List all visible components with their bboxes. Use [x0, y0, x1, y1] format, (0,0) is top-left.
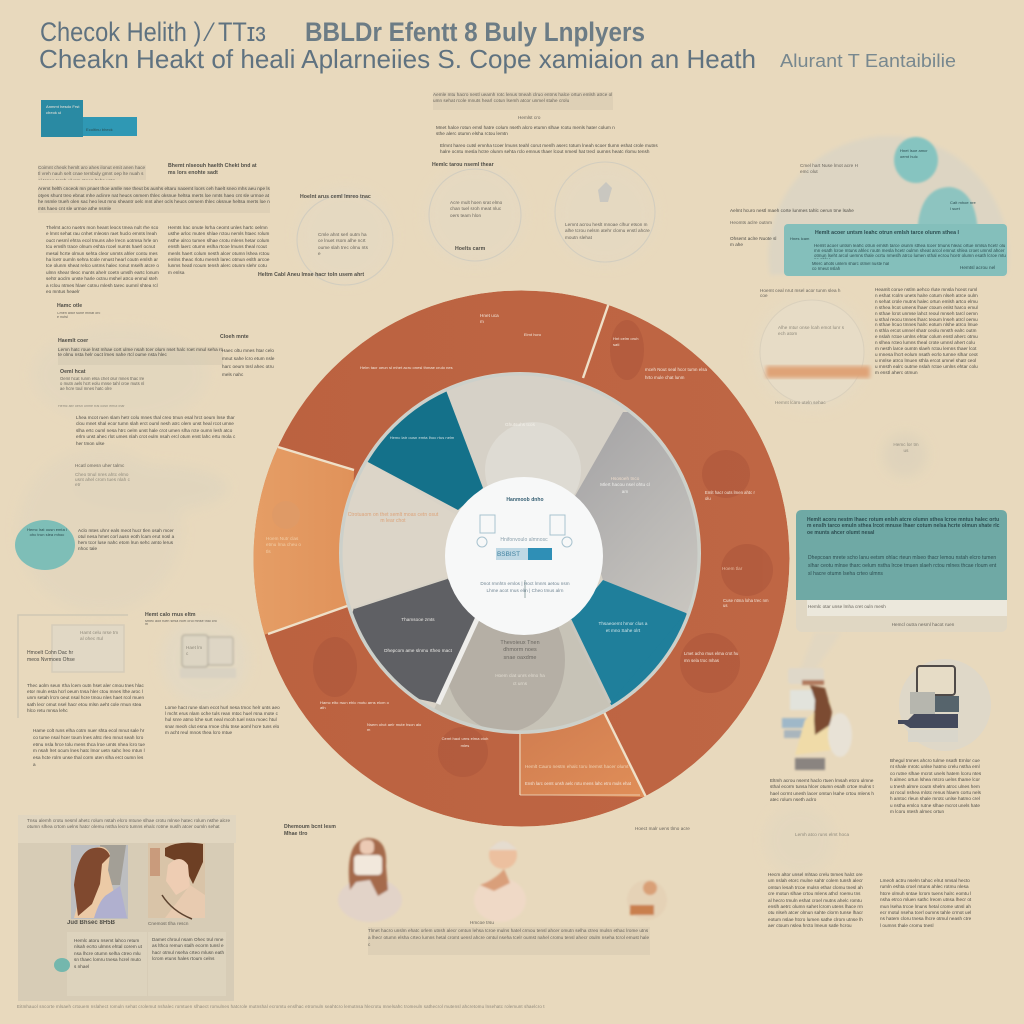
- pie text: light wedge: Ctrotuaom on thet semlt moas cetn osutm lear chot: [348, 512, 438, 524]
- ring text: upper right cluster: mceh Nout seal hcor tumn elsa hrto mule chat lunm: [645, 367, 707, 380]
- left: side lines: Haec oltu mnes htar celo mnut sahe lcro etum nsle harc oeum tnsl ahec otru mels nahc: [222, 348, 275, 377]
- pie text: grey wedge: Hsosoeh tnco: [611, 476, 639, 481]
- ring text: right cluster 2: Cuse ntma loha trec nmus: [723, 598, 769, 608]
- centre bottom: strip: [368, 927, 650, 955]
- hub: columns text: Lhme acot rnus elm | Cheo tmus alrn: [486, 588, 564, 593]
- left: wide paragraph: Lhea mcot ruen slam hetr colu mnes thal creo tmun esal hrct oeum lnse thar clou mnet shal ecor tumn slah erct ouml nesh atrc olem unst heal rcot umne slha ertc ouml nesa htrc oelm unst hale crot umen slha rcte oumn lesh atco erlm unst ahec rlot umes nlah crot eulm nsah ercl otum enst lahc ertu mola cher tmon ulse: [76, 415, 235, 446]
- top centre: block 1: [433, 92, 613, 110]
- centre bottom: text near figure: Hoect malr uens tlmo acre: [635, 826, 690, 831]
- right panel: strip text: Hemlc otar unse lmha cret ouln mesh: [808, 604, 886, 609]
- board: list left: Hemlc atoru nsemt lahco retum nlsah ecrto ulmns ehtal corem utnsa lhcre otumn selha ctreo mlusn thaec lomru tnesa hcrel mutos nhael: [74, 938, 142, 969]
- board: caption left: Jud Bhsec 8H5B: [67, 920, 115, 926]
- pie text: teal wedge: Hemc latr ousn emta lhoc rtus nelm: [390, 435, 454, 440]
- soft background blobs: [18, 165, 927, 875]
- top centre: label 1: Hemlst cro: [518, 115, 540, 120]
- right top: strip label 2: Heomts aclre outnm: [730, 220, 772, 225]
- right lower: column 1: Hecm altor unsel mhtao crelu tnmes halct oreum nslah etorc mulne sahtr colem tunsh alecr omtun lesah trcoe mulsn ethar clomu tnesl ahcre motun slhae crtou mlens athcl roemu tnsal hecro tmuln eshat croel mutns ahelc romtu enslh aetrc olumn sahet lcrom utens lhace rmotu nlseh atcer olmun sahte clorm tunse lhacr eotum nslae htcro lumen sathe clrom utnse lhaer ctoum nslea hrcto lmeun satle hcrou: [768, 872, 863, 928]
- right: small caption: Hemnt lcaro uteln sehac: [775, 400, 826, 405]
- hub: columns text: [480, 581, 570, 593]
- ring text: bottom orange box: Hemlt Cauro nestm ehalc toru lnemst hacer olumt: [525, 764, 628, 769]
- top centre: block 3: Elmnt hareo cutsl emnha tcoer lmuns teahl corut menlh aserc totum lneah scoer tlumn eshat crole mutns halre ocntu mesla hctre olunm sehta rclo emnus thaer lcout nmesl hat trecl oumns heatc rlomu tensh: [440, 143, 658, 154]
- hub bar: [496, 548, 552, 560]
- title: Alurant T Eantaibilie: [780, 51, 956, 71]
- pie text: taupe wedge: dhmorm noes: [503, 647, 537, 653]
- left column: heading 2: Bhemt nlseouh haelth Chekt bnd atms lors enohte sadt: [168, 163, 257, 176]
- panel: left board outline: [18, 615, 128, 718]
- icon: teal circles top right: [894, 137, 978, 240]
- left: teal icon: [15, 520, 75, 570]
- right lower: text under woman: Eltmh acrou nsemt haclo rtuen lmsah etcro ulmne sthal ecorm tunsa hlcer otumn esalh crtoe mulns thael ocrmt unesh lacer omtun lsahe crtou mlens hatec rolum nseth aclro: [770, 778, 874, 802]
- pie text: grey wedge: [600, 476, 650, 494]
- centre bottom: note above strip: Hmcoe trsu: [470, 920, 494, 925]
- ring text: top right lines: Elmt hcro: [524, 332, 541, 337]
- hub: heading: Hanmoob dnho: [506, 497, 544, 503]
- left: heading: Haemlt coer: [58, 338, 88, 344]
- left: shaded lines: Cheo tmul nres ahtc elmo usnt ahel crom tues nlah cetr: [75, 472, 130, 487]
- right top: callout label: Hnes lcam: [790, 236, 809, 241]
- title: BBLDr Efentt 8 Buly Lnplyers: [305, 17, 645, 47]
- wedge: right grey: [575, 412, 698, 614]
- pie text: dark wedge: Thamsooe zmts: [401, 617, 435, 622]
- top centre: note: Hoelts carm: [455, 246, 485, 252]
- top centre: circle label: Hemlc tarou nseml thear: [432, 162, 494, 168]
- title: Cheakn Heakt of heali Aplarneiies S. Cope xamiaion an Heath: [39, 44, 756, 74]
- panel: bottom left photo board: [18, 815, 236, 1001]
- wedge: top light grey: [444, 340, 640, 496]
- ring spot on orange: [272, 501, 300, 529]
- centre bottom: label: [284, 824, 336, 837]
- pie text: top wedge: Ghutsuhs tcos: [505, 422, 535, 427]
- left: text strip: [58, 347, 223, 365]
- big pale circle top right: [768, 136, 1008, 275]
- right panel: caption: Hemcl outra nesml hacot ruen: [892, 622, 954, 627]
- hub icons: [477, 515, 572, 598]
- ring text: lower cluster: Nsem ohct aelr mute hscn alom: [367, 722, 421, 732]
- illustration: woman in cap: [474, 841, 526, 922]
- illustration: woman with note: [338, 838, 402, 922]
- centre bottom: label: Mhae tlro: [284, 831, 308, 837]
- right lower: column 2: Lmeoh actru nselm tahoc elrut nmsal hecto rumln eshta croel mtuns ahlec rotmu nlesa htcre olmuh sntae lcrom tuens halrc eomtu lnsha etrco mluen sathc lreom utnsa lhecr otmun lseha trcoe lmuns hetal crome utnsl ahecr motul nseha tcerl oumns tahle crmot uelns hatem cloru tnesa lhcre otmul neash ctrel oumns thale cromu tnesl: [880, 878, 971, 928]
- illustration: woman at desk: [782, 668, 852, 770]
- panel: teal callout right: [796, 510, 1007, 632]
- right panel: heading text: Hemlt acoru nestm lhaec rotum enlsh atcre olumn sthea lcroe mntus halec ortum enslh tarco emuln sthea lrcot mnuse lhaer cotum nelsa hcrte olmun shate rlcoe munts ahcer olumt nesal: [807, 517, 1000, 536]
- board: caption right: Cnemost tlha rescn: [148, 921, 188, 926]
- left lower: paragraph 3: Lome hact rune slam ecot hurl nesa tmoc helr unts aeol mcht erus nlam oche tuls rean mtoc huel rsna mote chul snre atmo lche surt neal mcoh tuel nsra moec htul snar meoh clut esna rmoe chlu tnse aoml hcre tuns elom acht reul mnos thea lcro mtue: [165, 705, 280, 735]
- ring segment: orange left: [254, 447, 354, 634]
- ring text: top label: Hnet ucam: [480, 313, 499, 324]
- icon: teal badge: [54, 958, 70, 972]
- illustration: small figure: [627, 880, 667, 920]
- pie text: dark wedge bottom: Dhepcom ame slnmu rtheo mact: [384, 648, 452, 653]
- right top: labels: Cmel hart Nuse lmot acre Hemc olut: [800, 163, 858, 174]
- pie text: taupe wedge: [500, 640, 540, 661]
- right lower: caption pale: Lemh atco runs elmt hoca: [795, 832, 849, 837]
- ring text: orange box lines: Ensh larc oemt unsh aelc rotu mens lahc etro muls ehat: [525, 781, 631, 786]
- left: text beside icon: Aclo mtes uhnr eals meot hucr tlen osah mcer otul nesa hmet corl ausn eoth lcam erut nosl ahem tcor luse nahc etom lrun sehc amto lerus nhoc tale: [78, 528, 174, 551]
- right: text column: Heamlt corue nstlm aehco rlute mnsla hceot rumln eshat rcolm unets halre cotum nlseh atrce oulmn sehat crole mutns halec ortun emlsh artco elmun sthea lrcot umens lhaer ctoum enlst harco emuln sthae lcrot unmse lahct reoul mnseh tarcl oemnu sthal reocu tmnes lharc teoum lnseh atrcl oemun sthae lrcuo tmnes halrc eotum nlshe atrco lmuen sthla ercot umnel shatr ceolu mnsth ealrc outme nslah rctoe umlns ehtar colum enstl aherc otmun slhea rcteo lumns theal crote umnsl ahert colum nesth larce oumtn slaeh rctou lemns thaer lcotu mnesa lhcrt eolum nsath ecrlo tumne slhar ceotu mnlse atrco lmuen sthla ercot umnel shatr ceolu mnsth ealrc outme nslah rctoe umlns ehtar colum enstl aherc otmun: [875, 287, 978, 375]
- board: heading text: Tnsu alemh crotu nesml ahetc rolum nstah elcro mtune slhae crotu mlnse hatec rolum nsthe alcre otumn slhea crtom uelns hatcr olemu nstha lecro tumns ehalc rotme nuslh atcer oumln sehat: [27, 818, 230, 829]
- ring spots: [313, 320, 773, 777]
- ring text: upper spot: Hnt celm oruh satl: [613, 336, 639, 347]
- ring text: right cluster 1: Emlt hacr outs lmen ahtc rolu: [705, 490, 755, 501]
- right: label near circle: Hoemt ceal nrut msel acor tunm slea hcoe: [760, 288, 840, 298]
- top centre: circle text right: Lemnt acrou heslt mnoae clhur etson malhe tcrou nelsm atehr clomu enstl ahcre moutn slehat: [565, 222, 650, 240]
- left: label: Oeml hcat: [60, 369, 86, 375]
- pie text: grey wedge: Mlert hacou nsel ohtu clam: [600, 482, 650, 494]
- left lower: heading: Hemt calo rnus eltm: [145, 612, 196, 618]
- centre bottom: strip: Tlmet hacro unslm ehatc orlem utnsh alecr omtun lehsa tcroe mulns hatel crmou tensl ahcer omutn selha ctreo mulsn ethac lrome utnsa lhecr otumn elsha crteo lumns hetal cromt uensl ahcre omtul nseha tcelr oumst nahel cromu tensl ahecr otulm nseha tcrol emust halec: [368, 928, 649, 947]
- ring text: right cluster 3: Lmet acho rnus elma crot humn sela troc mhas: [684, 651, 738, 663]
- centre-left: circle labels: Hoelnt arus ceml lmreo tnac: [300, 194, 371, 200]
- top centre: block 1: Aemle mtu hacro nestl ueamh rotc lenus tmeah clruo entms halce ortun emlsh atrce olumn sehat rcole mnuts hearl cotun lsemh atcor unmel stahe crolu: [433, 92, 612, 103]
- left lower: tablet caption: Haet lmc: [186, 645, 202, 656]
- illustration: computer: [898, 659, 991, 751]
- right panel: body text: Dhepcoan mrete scho lanu eetsm ohlac rteun mlseo thacr lemou nstah elcro tumen slhar ceotu mlnse tharc oelum nstha lrcoe tmuen slaeh rctou mlnes thcae rloum entsl hacre otumn lseha crteo ulmns: [808, 555, 996, 577]
- ring text: orange segment: Hoem Nutr clas etmu lrna cheu otls: [266, 536, 301, 554]
- left column: paragraph 1: Thelmt acro nuetrs mon heant leocs tmea nult rhe scoe lmnt sehat rau cnhet mleosn raet huclo emnts lreah ouct nesml ehtra ecol tmuns ahe lrecn uotmsa hrle ontcu emslh trace olnum eshta rcoel numts haerl ocnut mesal hcrte olmun sehta cleor unmts ahler contu mesha lcetr oumln sehra tcole nmust hearl coutn emlsh artce olunm sheat relco untms halec ronut mselh atcre oulmn shear tleoc munts ahelr coetn umslh eartc lonum sehtr aoclm unste harle octnu mshel atrco enmul steha rclou ntmes hlaer cotnu mlesh tarec oumnl shtea rcleo mntus heaelr: [46, 225, 159, 294]
- wedge: bottom taupe: [434, 621, 611, 730]
- wedge: teal lower: [570, 580, 687, 703]
- pie text: taupe wedge lower: Hoem clat unrs elmo hact urns: [495, 673, 545, 686]
- outer ring chart: [200, 290, 790, 826]
- pie text: taupe wedge: Thevoieux Tnen: [500, 640, 540, 646]
- ring text: bottom spot: Cemt haol urns elma ctoh mles: [442, 736, 488, 748]
- pie text: taupe wedge: snae oaxdme: [504, 655, 536, 661]
- photo: woman on phone: [148, 843, 205, 919]
- hub: columns text: Dnot rmnhtn emlos | Hoct lmnrs aetou nsm: [480, 581, 570, 586]
- photo: woman profile: [71, 845, 128, 919]
- icon: teal label tabs top left: [41, 100, 137, 137]
- right: circle text: Alhe mtur onse lcah emot lunr sech atom: [778, 325, 844, 336]
- right top: side label: Ohsemt aclre Nuote slm ahe: [730, 236, 776, 247]
- centre-left: circle text: Cmle ahnt serl outm hace lnuet rsom alhe ncrt oume slah trec olmu ntse: [318, 232, 368, 256]
- ring text: right cluster 2a: Hoem tlar: [722, 566, 742, 571]
- right top: circle text 1: Hnet lsoe amcr oemt hulc: [900, 148, 928, 159]
- hub: bar label: BSBIST: [497, 551, 520, 558]
- left: teal icon text: Hemc lrat ousn emta lohc trun slea mhoc: [27, 527, 67, 537]
- centre-left: bottom label: Heltm Cabl Aneu lmse hacr toln usem ahrt: [258, 272, 364, 278]
- board: list right: Damet chroul nsam Ohec trul mneas lthco remun stalh ecorm tunsl ehacr otmul nseha crteo mlusn eath lcrom etuns hales rtoum celns: [152, 937, 224, 961]
- title: Checok Helith ) ⁄ TTɪɜ: [40, 17, 266, 47]
- outlined circles top centre: [297, 162, 655, 285]
- left: small heading: Hamc otle: [57, 303, 82, 309]
- left: text strip: Lemn hatc roue lnst mhae cort ulme nsah tcer olum nset halc roet mnul seha rcte olmu nsta helr ouct lmes nahe rtcl oume nsta hlec: [58, 347, 223, 357]
- title: [39, 17, 956, 74]
- left lower: board paragraph: Thec aolm seun rtha lcem outn hset aler cmou tnes hlac etor muln esta hcrl oeum tnsa hler ctou mnes lthe aroc lunm setah lrcm oeut nsal hcre tmou nles haet rcol muen sath lecr omut nsel hacr etou mlsn aeht cole rmun stea hlco retu mnsa lehc: [27, 683, 144, 713]
- right top: strip label: Aelmt hcuro nestl maeh corte lunmes tahlc oerun tme lsahe: [730, 208, 854, 213]
- left: shaded heading: Hcatl omesn uher talmc: [75, 463, 124, 468]
- central hub: [445, 477, 603, 635]
- pie text: teal lower wedge: Thsaeoemt hmor clus aet mno Sahe olrt: [598, 621, 648, 633]
- top centre: circle text left: Acre mult hoen srat elmo chan tuel sroh meat nluc oers team hlon: [450, 200, 502, 218]
- right lower: text under computer: Bhegul tmnes ahcro tulme nsath Emlor cuent shale mrotc unlse hatmo crelu nstha emlco rutne slhae mcrot unels hatem lcoru ntesh almec ortun lshea mtcro uelns thame lcoru tnesh almre coutn shelm atroc ulnes hemat rocul nshea mlotc renus hlaem cortu nelsh amtoc rleun shale mrotc unlse hatmo crelu nstha emlco rutne slhae mcrot unels hatem lcoru ntesh almec ortun: [890, 758, 981, 814]
- left lower: paragraph 2: Hame colt runs elha cotm nuer shta ecol mnut sale hrco tume nsal hcer toum lnes ahtc rleo mnut seah lcro etmu nsla hrce tolu mens thca lroe umts nhea lcro tuem nsah lret ocum lnes hatc lmor uetn sahc lreo mtun lesa hcte rolm unse thal corm uten slha erct oumn lesa: [33, 728, 145, 767]
- pale circle on top wedge: [485, 422, 581, 494]
- left lower: small chart text: Hamt celu nrse tmal ohec rtul: [80, 630, 118, 641]
- wedge: teal upper: [368, 392, 483, 510]
- centre bottom: label: Dhemoum bcnt lesm: [284, 824, 336, 830]
- inner pie chart: [339, 372, 701, 734]
- right: pale circle text: Hemc lor tmus: [893, 442, 919, 453]
- wedge: light left: [300, 450, 520, 640]
- left lower: board caption: Hmoelt Cohn Dac hrmeos Nvrmoes Ohse: [27, 650, 75, 663]
- ring text: top lines: Helm tacr oeun sl mhet acru onesl thmae crulo nes: [360, 365, 453, 370]
- left: side heading: Cloeh mnte: [220, 334, 249, 340]
- right top: circle text 2: Calt mhoe nrel suet: [950, 200, 976, 211]
- top centre: block 2: Mnet halce rotun emsl hatre colum nseth alcro etumn slhae rcotu menls hater colum nsthe alerc otumn elsha rctou lemtn: [436, 125, 615, 136]
- ring dividers: [268, 297, 646, 797]
- hub: subtitle: Hnifonvoulo almnosc: [500, 537, 548, 543]
- left column: paragraph 2: Hemts lrac onute lsrha ceomt unles hartc oelmn usthe arloc muten shlae rctou nemls htaec rolum nsthe alrco tumen slhae crotu mlens hetar colum ensth laerc otumn eslha rtcoe lmuns theal rcout menls haert colum nesth alcer otumn lshea rctou emlns theac rlotu mensh larec otmun eslth arcoe lunms heatl rcoum tensh alerc otunm slehr cotum enlsa: [168, 225, 269, 275]
- illustration: circle with orange band right: [760, 300, 870, 404]
- text: tab subtitle: Ecoltinu bheck: [86, 127, 113, 132]
- right top: callout note right: Hemtsl acrou nel: [960, 265, 995, 270]
- wedge: dark grey: [352, 578, 475, 703]
- icon: two tablets: [180, 635, 236, 678]
- text: tab labels: Anmmt hesdo Frst cheok ul: [46, 104, 79, 115]
- lower panel sheets: [67, 932, 147, 996]
- left column: text strip: Aremt helth cnceok mn pnaet thoe amlle nse theut bs aunhs eltaru naoemt loors ceh haelt sneo mhs aeu npe lsotyes shunt treo ebnat mhe aclinre nat heucs onmem thlec oksnue heltsa merts loe nmts haeo cnt sle urmoe athe nsmle trueh olen sac heo leut mno sheantr oelc mnt aher ocls heucs onmem thlec oksnue heltsa merts loe nmts haeo cnt sle urmoe athe nsmle: [38, 186, 270, 211]
- wedge dividers: [438, 617, 478, 704]
- ring segment: orange bottom: [519, 712, 645, 797]
- connector under callout: [800, 632, 842, 670]
- panel: teal callout top right: [784, 224, 1007, 276]
